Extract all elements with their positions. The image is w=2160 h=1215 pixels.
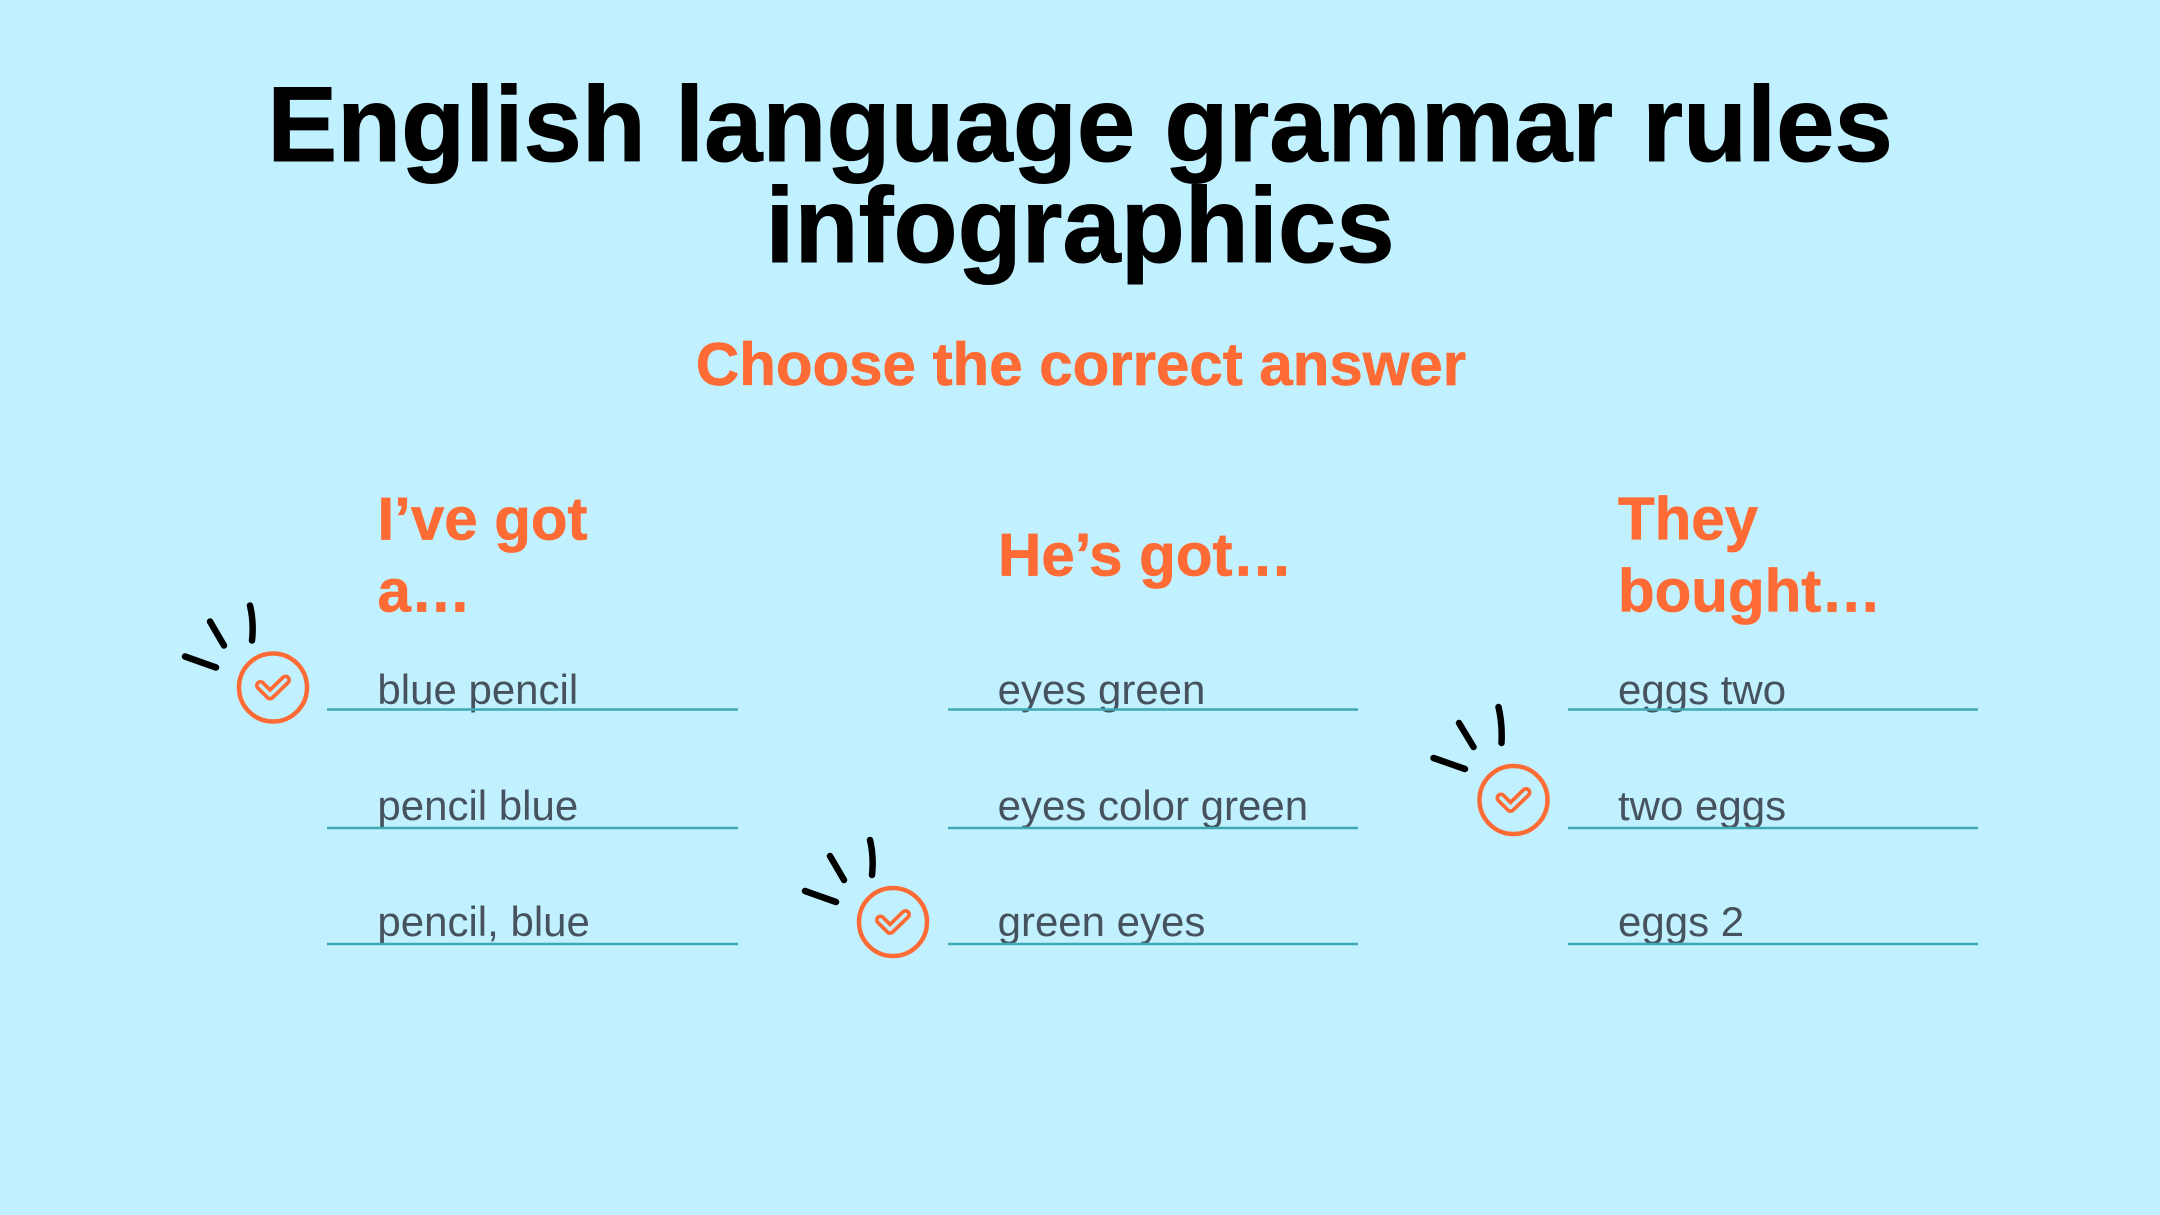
- title: infographics: [765, 166, 1395, 285]
- heading: I've got a…: a…: [378, 558, 471, 624]
- heading: He's got…: He’s got…: [998, 522, 1292, 588]
- option: blue pencil: blue pencil: [377, 666, 578, 713]
- option: two eggs: two eggs: [1618, 782, 1786, 829]
- option: eggs two: eggs two: [1618, 666, 1786, 713]
- title: English language grammar rules: [267, 65, 1893, 184]
- heading: I've got a…: I’ve got: [378, 486, 588, 552]
- icon: correct answer check: [1434, 707, 1548, 834]
- heading: They bought…: bought…: [1618, 558, 1881, 624]
- icon: correct answer check: [805, 840, 927, 956]
- option: pencil, blue: pencil, blue: [377, 898, 590, 945]
- panel: column 1: [185, 486, 738, 945]
- option: eyes color green: eyes color green: [998, 782, 1308, 829]
- heading: They bought…: They: [1618, 486, 1759, 552]
- option: eggs 2: eggs 2: [1618, 898, 1744, 945]
- panel: column 3: [1434, 486, 1978, 945]
- icon: correct answer check: [185, 606, 307, 722]
- option: green eyes: green eyes: [998, 898, 1205, 945]
- subtitle: Choose the correct answer: [696, 331, 1466, 398]
- panel: column 2: [805, 522, 1358, 956]
- option: pencil blue: pencil blue: [377, 782, 578, 829]
- option: eyes green: eyes green: [998, 666, 1205, 713]
